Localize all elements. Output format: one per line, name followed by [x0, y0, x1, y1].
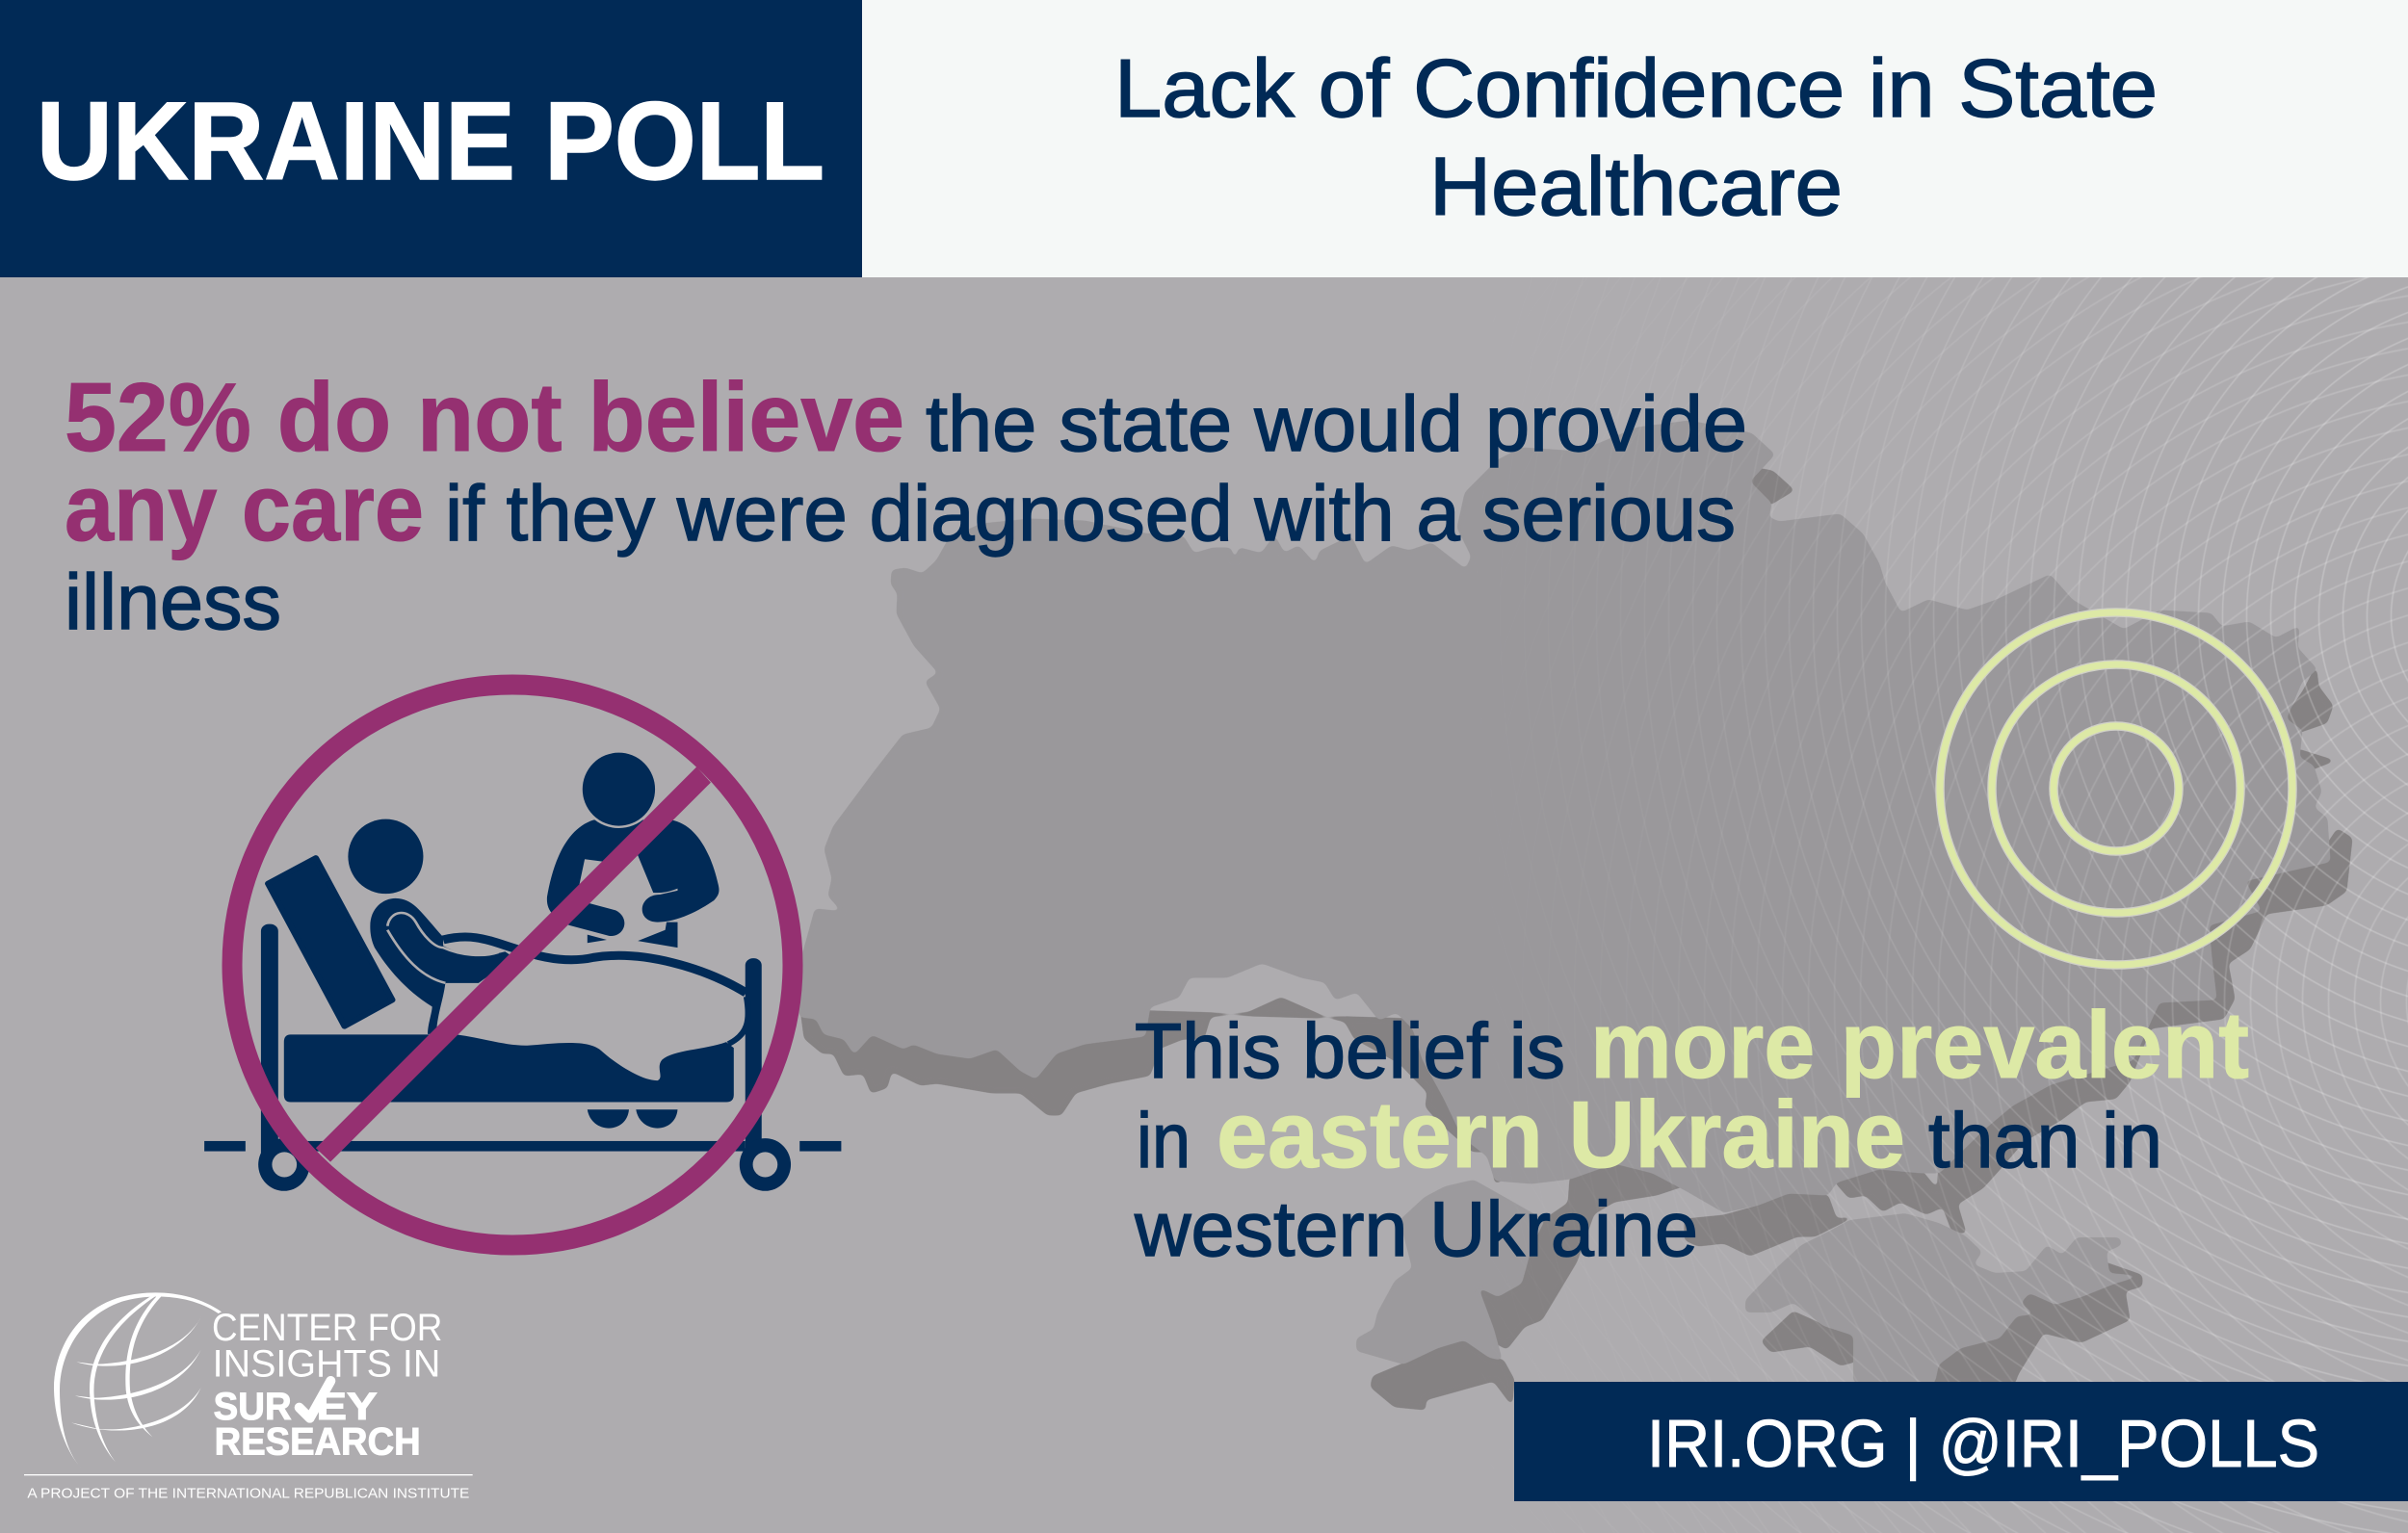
prohibition slash [316, 766, 711, 1162]
map shadow: southern coast [800, 468, 2351, 1409]
header: navy label panel [0, 0, 862, 277]
blanket [443, 937, 746, 993]
logo: Center for Insights in Survey Research: SUR [214, 1386, 292, 1428]
logo: Center for Insights in Survey Research: A PROJECT OF THE INTERNATIONAL REPUBLICAN INSTITUTE [27, 1486, 469, 1502]
icon: hospital bed with no-care prohibition sign [204, 685, 841, 1245]
text block: more prevalent in eastern Ukraine: western Ukraine [1134, 1186, 1698, 1273]
mattress [284, 1034, 734, 1103]
title: Healthcare [1429, 142, 1843, 233]
logo: Center for Insights in Survey Research: CENTER FOR [212, 1307, 442, 1349]
icon: concentric target rings over eastern Ukraine [1940, 612, 2292, 965]
header: title panel [862, 0, 2408, 277]
Crimea [1745, 1213, 2141, 1383]
title [1114, 43, 2158, 233]
icon: check mark [300, 1381, 330, 1418]
backrest [268, 858, 392, 1026]
text block: 52% do not believe [65, 364, 1747, 646]
Odesa coastal land [1356, 1180, 1545, 1364]
text block: 52% do not believe: any care [65, 455, 424, 560]
text block: more prevalent in eastern Ukraine: more prevalent [1590, 992, 2249, 1098]
text block: 52% do not believe: if they were diagnosed with a serious [445, 470, 1736, 558]
map body [800, 422, 2329, 1211]
guilloche line pattern [1645, 277, 2408, 1533]
text block: more prevalent in eastern Ukraine: eastern Ukraine [1217, 1081, 1905, 1187]
caregiver [547, 751, 719, 948]
logo: Center for Insights in Survey Research: EY [316, 1386, 378, 1428]
title: Lack of Confidence in State [1114, 43, 2158, 135]
map of Ukraine [800, 422, 2351, 1409]
text block: 52% do not believe: the state would provide [926, 380, 1747, 468]
patient [348, 819, 514, 1034]
text block: 52% do not believe: illness [65, 559, 281, 646]
text block: more prevalent in eastern Ukraine [1134, 992, 2249, 1273]
text block: more prevalent in eastern Ukraine: in [1137, 1098, 1191, 1184]
bed posts, rail and wheels [204, 924, 841, 1191]
footer banner [1514, 1382, 2408, 1501]
text block: more prevalent in eastern Ukraine: This belief is [1135, 1008, 1565, 1095]
prohibition ring [232, 685, 793, 1245]
text block: more prevalent in eastern Ukraine: than in [1928, 1098, 2162, 1184]
logo: Center for Insights in Survey Research: INSIGHTS IN [213, 1342, 440, 1385]
heading: UKRAINE POLL: UKRAINE POLL [37, 80, 824, 203]
logo: Center for Insights in Survey Research [24, 1292, 473, 1502]
footer banner: IRI.ORG | @IRI_POLLS [1647, 1406, 2319, 1481]
logo: Center for Insights in Survey Research: RESEARCH [215, 1421, 421, 1464]
text block: 52% do not believe: 52% do not believe [65, 364, 904, 472]
icon: globe [54, 1292, 222, 1468]
